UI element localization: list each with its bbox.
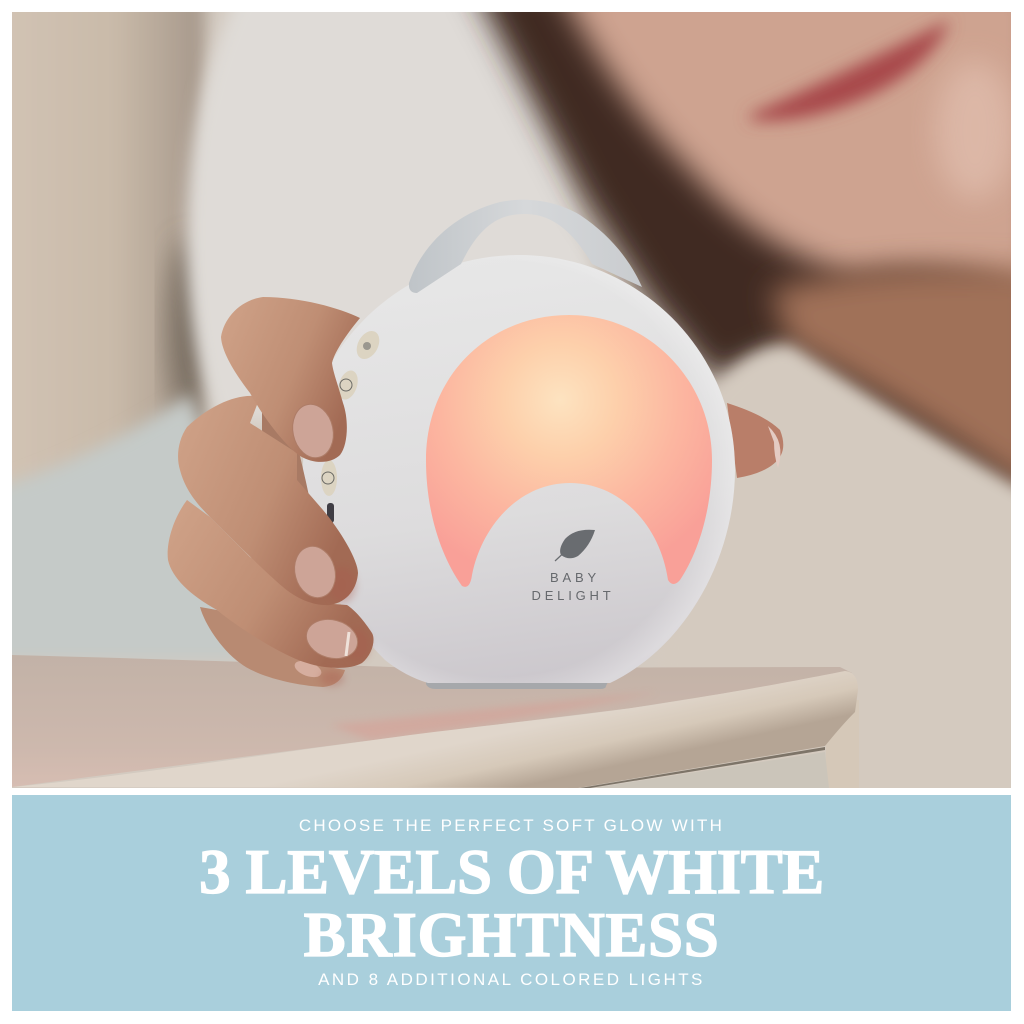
intro line: CHOOSE THE PERFECT SOFT GLOW WITH bbox=[299, 816, 724, 835]
speckled blanket bbox=[0, 395, 270, 660]
headline: BRIGHTNESS bbox=[304, 900, 719, 970]
logo text: BABY bbox=[550, 570, 600, 585]
middle finger bbox=[178, 396, 358, 605]
webbing between fingers bbox=[262, 405, 312, 510]
closing line: AND 8 ADDITIONAL COLORED LIGHTS bbox=[318, 970, 705, 989]
face bbox=[555, 0, 1024, 300]
headline: 3 LEVELS OF WHITE bbox=[199, 837, 824, 907]
table top surface bbox=[12, 655, 852, 787]
logo text: DELIGHT bbox=[532, 588, 614, 603]
little finger bbox=[200, 607, 345, 687]
body bbox=[303, 255, 735, 683]
blurred background: wall, pillow, person bbox=[0, 0, 1024, 810]
side buttons bbox=[321, 327, 384, 523]
post bbox=[826, 700, 859, 788]
drawer bbox=[594, 752, 829, 788]
ring nail highlight bbox=[346, 632, 349, 656]
small nail bbox=[292, 658, 324, 680]
icon: feather bbox=[555, 530, 595, 561]
index finger bbox=[221, 297, 360, 462]
hair bbox=[470, 0, 1024, 520]
shirt bbox=[650, 345, 1024, 810]
hand holding device bbox=[168, 297, 374, 687]
lips bbox=[750, 20, 950, 121]
fingernails bbox=[288, 400, 362, 664]
shadow strip bbox=[168, 240, 212, 420]
back finger bbox=[727, 403, 783, 478]
logo text bbox=[532, 570, 614, 603]
headline bbox=[199, 837, 824, 970]
caption band bbox=[12, 795, 1011, 1011]
pillow bbox=[187, 0, 625, 430]
fingertip redness bbox=[320, 567, 370, 686]
glowing lamp panel bbox=[426, 315, 712, 587]
handle bbox=[409, 200, 642, 293]
product photo bbox=[12, 12, 1011, 788]
ring finger bbox=[168, 500, 374, 668]
neck and chest bbox=[770, 268, 1024, 500]
night light device bbox=[303, 200, 735, 689]
wall bbox=[0, 0, 205, 510]
base bbox=[426, 678, 610, 689]
nightstand bbox=[12, 655, 859, 788]
table front edge bbox=[12, 671, 858, 788]
